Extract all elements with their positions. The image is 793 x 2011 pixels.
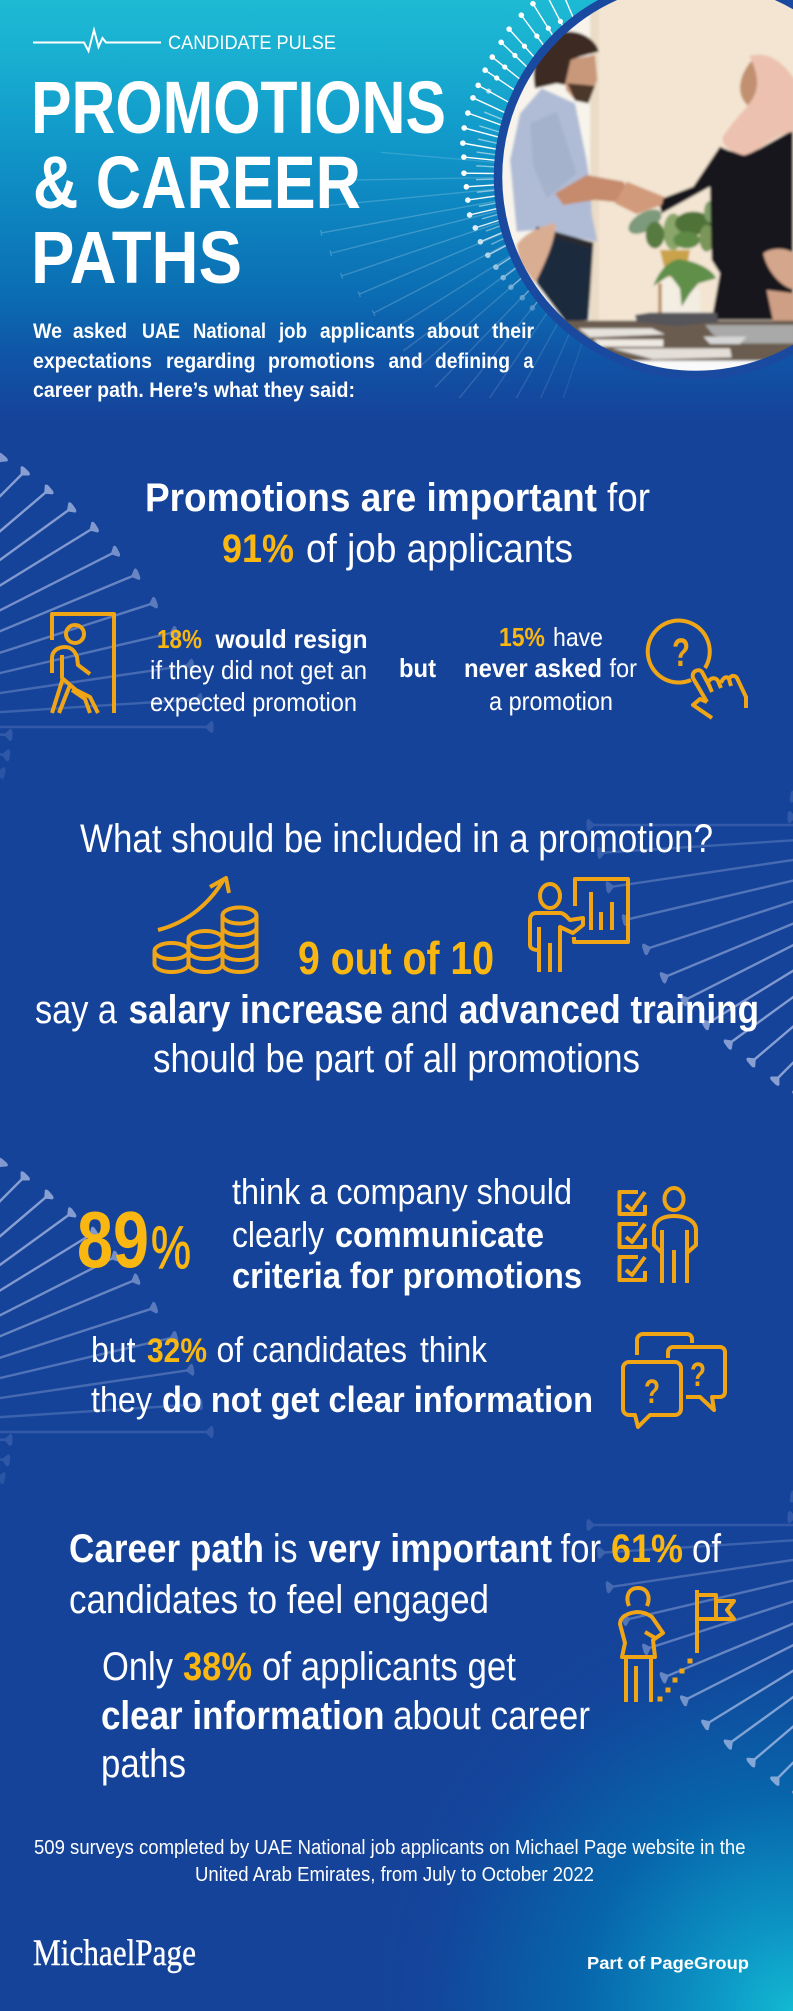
intro paragraph: job xyxy=(278,320,307,343)
stat: 15% never asked: a promotion xyxy=(489,686,613,716)
photo: two people shaking hands in round frame xyxy=(490,0,793,400)
title: PATHS xyxy=(31,216,242,299)
heading: Career path xyxy=(69,1527,264,1571)
text: salary and training: should be part of all promotions xyxy=(153,1037,640,1081)
icon: trainer with chart board xyxy=(530,879,628,972)
icon: person walking out of door xyxy=(52,614,114,713)
text: salary and training: and xyxy=(390,988,448,1032)
text: 38% clear information: paths xyxy=(101,1742,186,1786)
heading xyxy=(69,1527,722,1622)
text: 32% no clear information: 32% xyxy=(147,1332,207,1370)
title xyxy=(31,66,446,299)
heading xyxy=(145,476,650,571)
text: clear criteria: communicate xyxy=(335,1214,544,1255)
intro paragraph: promotions xyxy=(268,350,375,373)
text: 38% clear information: about career xyxy=(393,1694,590,1738)
text: salary and training: salary increase xyxy=(128,988,383,1032)
intro paragraph: UAE xyxy=(142,320,180,343)
big stat: 9 out of 10 xyxy=(298,932,494,984)
intro paragraph xyxy=(33,320,534,402)
text: 32% no clear information xyxy=(91,1329,593,1420)
heading: of job applicants xyxy=(306,527,573,571)
text: salary and training: advanced training xyxy=(459,988,759,1032)
icon: person looking at flag xyxy=(620,1588,734,1702)
icon: coin stacks with rising arrow xyxy=(154,878,256,972)
heading: Promotions are important xyxy=(145,476,597,520)
big stat 89%: % xyxy=(151,1214,191,1281)
intro paragraph: expectations xyxy=(33,350,152,373)
clasped hands xyxy=(615,182,664,214)
panel: promotions importance xyxy=(52,476,746,718)
intro paragraph: We xyxy=(33,320,62,343)
text: salary and training xyxy=(35,988,759,1081)
intro paragraph: career path. Here’s what they said: xyxy=(33,379,355,402)
footnote: 509 surveys completed by UAE National job applicants on Michael Page website in the xyxy=(34,1837,746,1859)
table xyxy=(564,318,793,362)
text: 32% no clear information: but xyxy=(91,1329,136,1370)
intro paragraph: and xyxy=(388,350,422,373)
stat: 18% would resign: would resign xyxy=(215,624,368,654)
intro paragraph: about xyxy=(427,320,479,343)
stat: 15% never asked: never asked xyxy=(464,653,602,683)
heading: What should be included in a promotion? xyxy=(80,817,713,861)
text: 32% no clear information: of candidates xyxy=(216,1329,407,1370)
heading: of xyxy=(692,1527,722,1571)
intro paragraph: defining xyxy=(435,350,510,373)
intro paragraph: regarding xyxy=(166,350,256,373)
text: 32% no clear information: think xyxy=(420,1329,488,1370)
woman xyxy=(658,130,793,320)
title: PROMOTIONS xyxy=(31,66,446,149)
title: & CAREER xyxy=(33,141,361,224)
icon: speech bubbles with question marks xyxy=(623,1334,725,1427)
heading: for xyxy=(560,1527,601,1571)
man xyxy=(537,230,593,323)
stat: 18% would resign: expected promotion xyxy=(150,687,357,717)
text: 38% clear information xyxy=(101,1645,590,1786)
heading: is xyxy=(273,1527,298,1571)
icon: question mark and pointing hand: ? xyxy=(672,631,690,675)
heading: 61% xyxy=(611,1527,683,1571)
icon: speech bubbles with question marks: ? xyxy=(644,1373,660,1411)
panel: what a promotion includes xyxy=(35,817,759,1081)
intro paragraph: a xyxy=(524,350,534,373)
panel: communicating criteria xyxy=(77,1171,725,1427)
text: 38% clear information: of applicants get xyxy=(262,1645,516,1689)
applauding hand left xyxy=(517,223,556,283)
text: 32% no clear information: they xyxy=(91,1379,152,1420)
text: salary and training: say a xyxy=(35,988,118,1032)
footnote xyxy=(34,1837,746,1886)
icon: checklist and person xyxy=(620,1188,696,1283)
heading: candidates to feel engaged xyxy=(69,1578,489,1622)
brand note: Part of PageGroup: Part of PageGroup xyxy=(587,1953,749,1973)
icon: question mark and pointing hand xyxy=(648,621,746,718)
stat: 15% never asked: for xyxy=(610,653,637,683)
stat: 15% never asked: have xyxy=(553,622,603,652)
text: 38% clear information: clear information xyxy=(101,1694,384,1738)
text: clear criteria: criteria for promotions xyxy=(232,1255,582,1296)
side sunbursts xyxy=(0,452,793,1800)
panel: career path xyxy=(69,1527,734,1786)
text: clear criteria: clearly xyxy=(232,1214,324,1255)
connector word: but: but xyxy=(399,653,436,683)
intro paragraph: applicants xyxy=(320,320,415,343)
intro paragraph: their xyxy=(492,320,534,343)
heading: 91% xyxy=(222,527,294,571)
applauding hand right xyxy=(763,249,793,290)
logo: Michael Page: MichaelPage xyxy=(33,1933,196,1974)
intro paragraph: National xyxy=(193,320,266,343)
stat: 18% would resign: 18% xyxy=(157,624,202,654)
stat: 15% never asked: 15% xyxy=(499,622,545,652)
big stat 89%: 89 xyxy=(77,1195,149,1284)
heading: for xyxy=(607,476,650,520)
plant and pot xyxy=(624,201,716,252)
text: 32% no clear information: do not get clear information xyxy=(162,1379,593,1420)
header sunburst xyxy=(320,0,582,398)
icon: speech bubbles with question marks: ? xyxy=(690,1356,706,1394)
header brand: pulse line and label xyxy=(33,30,336,54)
stat: 18% would resign: if they did not get an xyxy=(150,655,367,685)
text: clear criteria xyxy=(232,1171,582,1296)
stat: 18% would resign xyxy=(150,624,368,717)
text: clear criteria: think a company should xyxy=(232,1171,572,1212)
heading: very important xyxy=(308,1527,552,1571)
footnote: United Arab Emirates, from July to October 2022 xyxy=(195,1864,594,1886)
text: 38% clear information: Only xyxy=(102,1645,173,1689)
stat: 15% never asked xyxy=(464,622,637,716)
header brand: pulse line and label: CANDIDATE PULSE xyxy=(168,33,336,54)
text: 38% clear information: 38% xyxy=(183,1645,252,1689)
intro paragraph: asked xyxy=(73,320,127,343)
